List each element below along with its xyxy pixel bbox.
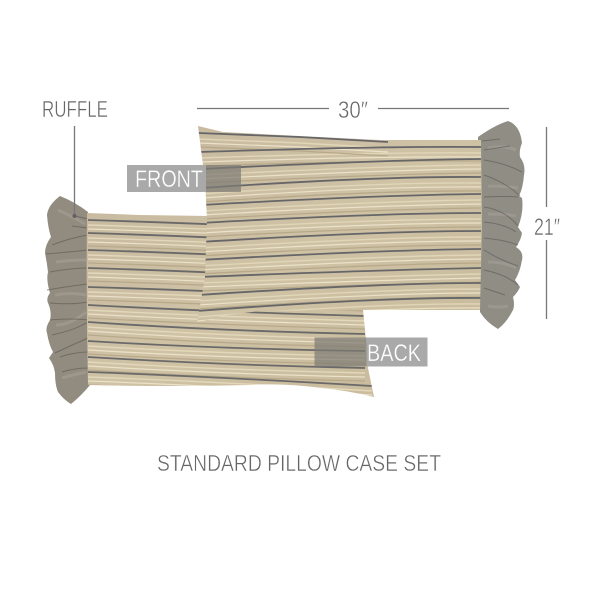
front pillow fabric bbox=[197, 126, 482, 323]
label: back: BACK bbox=[367, 340, 421, 367]
back pillow ruffle bbox=[45, 196, 90, 404]
caption: STANDARD PILLOW CASE SET bbox=[157, 450, 441, 476]
width dimension: 30 inches: 30″ bbox=[338, 97, 368, 124]
front pillow case bbox=[190, 120, 524, 330]
back pillow case bbox=[45, 196, 380, 405]
ruffle callout leader line bbox=[72, 126, 76, 218]
label: front bbox=[127, 165, 241, 193]
label: back bbox=[314, 338, 428, 367]
label: front: FRONT bbox=[135, 166, 203, 193]
front pillow ruffle bbox=[478, 121, 524, 329]
height dimension: 21 inches: 21″ bbox=[534, 214, 560, 241]
back pillow fabric bbox=[86, 213, 374, 397]
ruffle callout label: RUFFLE bbox=[42, 96, 108, 122]
